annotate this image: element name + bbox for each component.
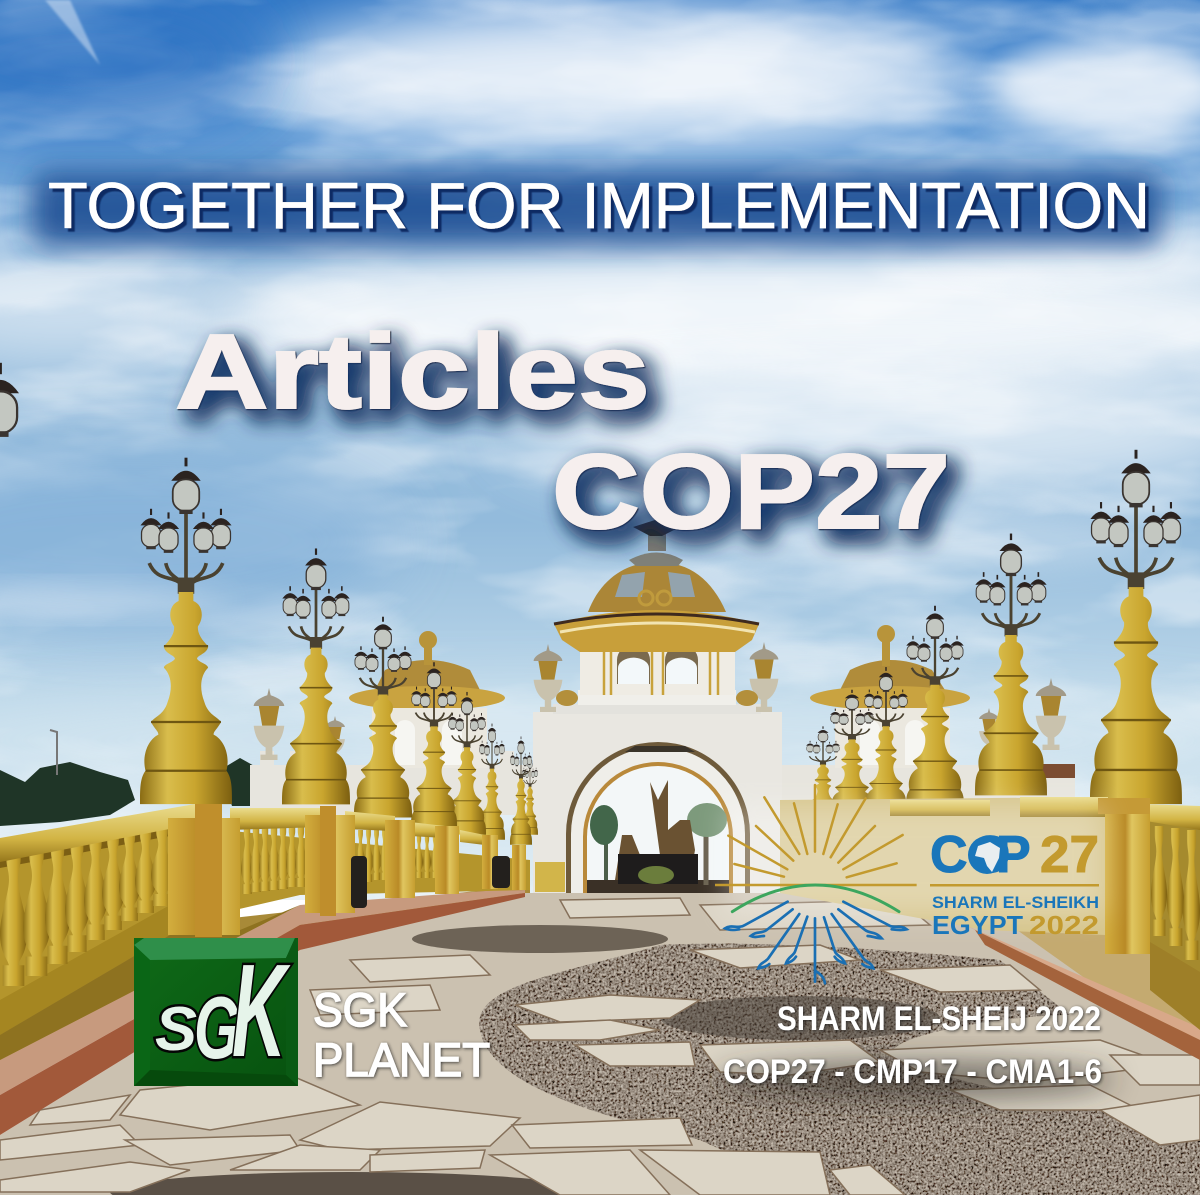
logo: COP27 wordmark: P — [996, 826, 1031, 884]
logo: COP27 wordmark: EGYPT — [932, 910, 1023, 940]
right curb — [965, 925, 1200, 1060]
cupola ring — [554, 610, 759, 652]
logo: COP27 wordmark: SHARM EL-SHEIKH — [932, 893, 1099, 912]
logo: COP27 wordmark: 27 — [1040, 826, 1099, 884]
pavement — [0, 893, 1200, 1195]
statue under arch — [590, 780, 727, 885]
heading: Articles: Articles — [175, 313, 650, 431]
central gate tower — [533, 520, 782, 926]
logo letters: SGK: K — [232, 937, 291, 1084]
logo: COP27 wordmark: O — [970, 826, 1010, 884]
icon: blue roots — [725, 902, 907, 983]
pebble mosaic — [110, 925, 1200, 1200]
logo letters: SGK: S — [155, 995, 197, 1064]
brand name: SGK Planet: PLANET — [313, 1033, 490, 1086]
icon: globe — [968, 836, 1006, 874]
lamp posts right — [806, 450, 1182, 825]
lamp posts left — [140, 458, 538, 845]
palm trees left — [0, 730, 260, 826]
balustrade piers — [168, 804, 565, 937]
brand name: SGK Planet: SGK — [313, 983, 407, 1036]
right pavilion — [775, 625, 1075, 810]
caption: Sharm El-Sheij 2022: SHARM EL-SHEIJ 2022 — [777, 1000, 1101, 1038]
logo: COP27 wordmark: 2022 — [1029, 910, 1099, 940]
logo: COP27 emblem sun and roots — [715, 785, 917, 983]
logo letters: SGK: G — [194, 978, 240, 1077]
icon: green horizon arc — [732, 885, 899, 912]
left balustrade — [0, 804, 565, 1060]
tower terrace — [553, 704, 761, 714]
icon: sun rays — [715, 785, 917, 885]
logo haze — [725, 805, 1105, 915]
brand name: SGK Planet — [313, 983, 490, 1086]
title: TOGETHER FOR IMPLEMENTATION — [48, 169, 1150, 242]
logo: COP27 wordmark — [930, 826, 1099, 940]
logo: COP27 wordmark: C — [930, 826, 968, 884]
text shadow patch — [715, 1060, 1115, 1100]
side lamp fragment at left edge — [0, 363, 19, 437]
dome — [588, 562, 726, 612]
heading: COP27: COP27 — [552, 433, 950, 551]
logo letters: SGK — [155, 937, 291, 1084]
caption: COP27 CMP17 CMA1-6: COP27 - CMP17 - CMA1-6 — [723, 1053, 1102, 1091]
title backdrop band — [32, 172, 1162, 246]
paving stones — [0, 898, 1200, 1195]
left curb — [0, 888, 525, 1135]
right balustrade — [780, 797, 1200, 1030]
far urns — [254, 678, 1066, 760]
bottom white edge — [0, 1195, 1200, 1200]
cupola drum — [580, 640, 735, 695]
sky background — [0, 0, 1200, 900]
ground fill under balustrades — [0, 885, 1200, 1080]
left pavilion — [250, 631, 540, 815]
logo: SGK green box — [134, 937, 298, 1086]
